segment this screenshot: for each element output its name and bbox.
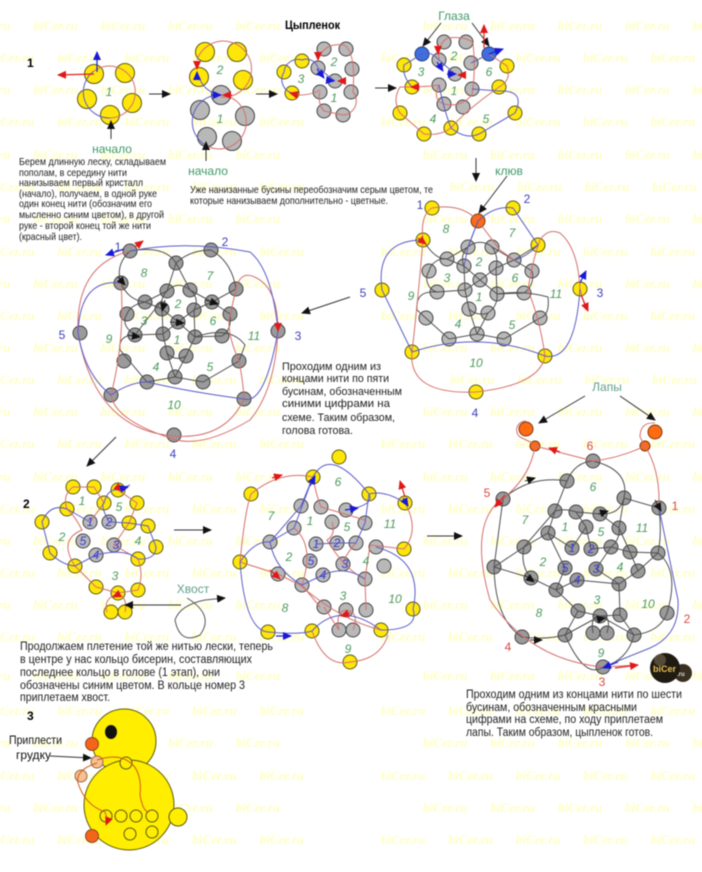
diagram: eyes rings: 5 bbox=[483, 112, 490, 126]
diagram: third ring: 3 bbox=[298, 72, 305, 86]
diagram: finished head: 3 bbox=[295, 329, 302, 343]
text block: recolor note: которые нанизываем дополнительно - цветные. bbox=[190, 195, 388, 207]
tail label: Хвост bbox=[177, 582, 210, 596]
diagram: body rings: 4 bbox=[320, 568, 327, 582]
arrow bbox=[256, 93, 277, 95]
logo: biCer badge: .ru bbox=[677, 672, 685, 678]
diagram: body start bbox=[35, 480, 225, 638]
diagram: head with beak: 2 bbox=[475, 255, 483, 269]
diagram: finished head: 1 bbox=[174, 333, 180, 347]
diagram: finished body with paws: 6 bbox=[590, 480, 597, 494]
diagram: finished body with paws: 3 bbox=[599, 675, 606, 689]
diagram: finished head: 4 bbox=[170, 447, 177, 461]
text block: step 1 instructions: Берем длинную леску, складываем bbox=[19, 156, 166, 168]
step number 2: 2 bbox=[23, 497, 30, 511]
diagram: body rings: 4 bbox=[363, 554, 370, 568]
diagram: body rings: 7 bbox=[268, 509, 276, 523]
text block: head complete: концами нити по пяти bbox=[282, 373, 389, 385]
text block: head complete: синими цифрами на bbox=[282, 398, 391, 410]
diagram: head with beak: 5 bbox=[360, 286, 367, 300]
diagram: eyes rings: 2 bbox=[450, 49, 458, 63]
diagram: head with beak: 3 bbox=[444, 271, 451, 285]
text block: step 1 instructions: руке - второй конец той же нити bbox=[19, 220, 151, 232]
diagram: head with beak bbox=[360, 164, 604, 420]
infographic: beaded chick pattern: biCer.ru biCer.ru biCer.ru biCer.ru biCer.ru bbox=[381, 501, 695, 516]
infographic: beaded chick pattern: biCer.ru biCer.ru biCer.ru biCer.ru biCer.ru bbox=[381, 436, 695, 451]
infographic: beaded chick pattern: biCer.ru biCer.ru biCer.ru biCer.ru biCer.ru bbox=[381, 308, 695, 323]
diagram: finished head: 6 bbox=[210, 314, 217, 328]
text block: final instructions: бусинам, обозначенным красными bbox=[466, 702, 637, 714]
text block: head complete: Проходим одним из bbox=[282, 361, 381, 373]
diagram: body rings: 1 bbox=[307, 514, 313, 528]
diagram: head with beak: 5 bbox=[509, 318, 516, 332]
arrow bbox=[475, 158, 477, 181]
diagram: finished body with paws: 5 bbox=[484, 486, 491, 500]
title: Цыпленок bbox=[285, 18, 341, 32]
diagram: finished head: 1 bbox=[115, 240, 122, 254]
diagram: finished body with paws: 3 bbox=[594, 593, 601, 607]
diagram: body start: 1 bbox=[79, 494, 85, 508]
infographic: beaded chick pattern: biCer.ru biCer.ru biCer.ru biCer.ru biCer.ru bbox=[381, 114, 695, 129]
diagram: finished head: 5 bbox=[59, 328, 66, 342]
diagram: body rings: 3 bbox=[342, 557, 349, 571]
diagram: body start: 4 bbox=[93, 548, 100, 562]
infographic: beaded chick pattern: biCer.ru biCer.ru biCer.ru biCer.ru biCer.ru bbox=[381, 629, 695, 644]
text block: step 2 instructions bbox=[20, 641, 273, 704]
diagram: finished head bbox=[59, 235, 302, 461]
diagram: finished body with paws: 2 bbox=[684, 612, 691, 626]
diagram: finished head: 2 bbox=[174, 297, 182, 311]
diagram: eyes rings: 1 bbox=[451, 84, 457, 98]
diagram: finished body with paws: 11 bbox=[636, 521, 648, 535]
beak bbox=[86, 738, 98, 750]
diagram: finished body with paws: 1 bbox=[562, 520, 568, 534]
text block: step 2 instructions: Продолжаем плетение той же нитью лески, теперь bbox=[20, 641, 273, 653]
diagram: head with beak: 4 bbox=[455, 317, 462, 331]
diagram: finished body with paws: 5 bbox=[562, 561, 569, 575]
infographic: beaded chick pattern: biCer.ru biCer.ru biCer.ru biCer.ru biCer.ru bbox=[381, 50, 695, 65]
diagram: finished body with paws: 1 bbox=[672, 499, 679, 513]
beak bead bbox=[471, 214, 485, 228]
diagram: head with beak: 1 bbox=[417, 198, 424, 212]
diagram: head with beak: 3 bbox=[597, 286, 604, 300]
diagram: body rings: 11 bbox=[384, 517, 396, 531]
diagram: body rings: 8 bbox=[282, 601, 289, 615]
diagram: finished body with paws: 9 bbox=[598, 646, 605, 660]
arrow bbox=[620, 396, 655, 420]
diagram: finished head: 2 bbox=[222, 235, 229, 249]
chest beads bbox=[75, 756, 103, 782]
diagram: eyes rings: 6 bbox=[486, 65, 493, 79]
text block: step 1 instructions bbox=[19, 156, 166, 243]
diagram: third ring: 1 bbox=[331, 91, 337, 105]
text block: head complete: схеме. Таким образом, bbox=[282, 412, 395, 424]
diagram: finished head: 5 bbox=[207, 360, 214, 374]
text block: final instructions bbox=[466, 689, 682, 739]
diagram: body start: 2 bbox=[105, 515, 113, 529]
diagram: finished head: 11 bbox=[248, 329, 260, 343]
text block: step 2 instructions: обозначены синим цветом. В кольце номер 3 bbox=[20, 680, 245, 692]
arrow bbox=[50, 756, 91, 758]
diagram: third ring bbox=[277, 42, 359, 122]
diagram: head with beak: 4 bbox=[472, 406, 479, 420]
diagram: finished body with paws: 2 bbox=[539, 555, 547, 569]
arrow bbox=[87, 437, 116, 466]
diagram: third ring: 2 bbox=[330, 55, 338, 69]
diagram: body start: 5 bbox=[80, 534, 87, 548]
tail loop bbox=[175, 598, 225, 638]
diagram: head with beak: 8 bbox=[443, 222, 450, 236]
diagram: finished body with paws: 4 bbox=[617, 560, 624, 574]
chick body bbox=[84, 760, 174, 850]
arrow bbox=[375, 87, 396, 89]
chick eye bbox=[105, 725, 117, 739]
diagram: finished body with paws: 3 bbox=[593, 562, 600, 576]
infographic: beaded chick pattern: biCer.ru biCer.ru biCer.ru biCer.ru biCer.ru bbox=[381, 703, 695, 718]
diagram: body rings: 3 bbox=[340, 589, 347, 603]
diagram: head with beak: 2 bbox=[524, 192, 531, 206]
infographic: beaded chick pattern: biCer.ru biCer.ru biCer.ru biCer.ru biCer.ru bbox=[381, 832, 695, 847]
arrow bbox=[174, 529, 211, 531]
diagram: finished body with paws: 5 bbox=[598, 525, 605, 539]
diagram: finished body with paws: 4 bbox=[574, 573, 581, 587]
diagram: head with beak: 9 bbox=[408, 289, 415, 303]
diagram: body start: 3 bbox=[113, 538, 120, 552]
diagram: finished body with paws: 10 bbox=[641, 597, 655, 611]
arrow bbox=[302, 297, 350, 313]
diagram: finished body with paws: 1 bbox=[569, 541, 575, 555]
infographic: beaded chick pattern: biCer.ru biCer.ru biCer.ru biCer.ru biCer.ru bbox=[381, 565, 695, 580]
diagram: eyes rings: Глаза bbox=[438, 9, 470, 23]
diagram: finished head: 4 bbox=[153, 360, 160, 374]
logo: biCer badge: biCer bbox=[653, 664, 677, 674]
arrow bbox=[149, 93, 170, 95]
diagram: body rings: 10 bbox=[388, 592, 402, 606]
diagram: eyes rings: 4 bbox=[430, 112, 437, 126]
diagram: body rings: 9 bbox=[345, 642, 352, 656]
step number 1: 1 bbox=[27, 56, 34, 70]
diagram: head with beak: 1 bbox=[476, 290, 482, 304]
diagram: body rings: 2 bbox=[285, 550, 293, 564]
text block: final instructions: цифрами на схеме, по ходу приплетаем bbox=[466, 714, 663, 726]
diagram: finished head: 8 bbox=[141, 266, 148, 280]
infographic: beaded chick pattern: biCer.ru biCer.ru biCer.ru biCer.ru biCer.ru bbox=[381, 768, 695, 783]
diagram: body rings: 5 bbox=[344, 520, 351, 534]
step number 3: 3 bbox=[27, 709, 34, 723]
eye beads bbox=[415, 47, 496, 61]
diagram: body rings: 2 bbox=[333, 536, 341, 550]
text block: step 1 instructions: (начало), получаем, в одной руке bbox=[19, 188, 157, 200]
diagram: eyes rings bbox=[393, 9, 522, 141]
diagram: finished head: 7 bbox=[207, 269, 215, 283]
chick wing bbox=[169, 808, 187, 826]
diagram: finished body with paws: 8 bbox=[536, 606, 543, 620]
diagram: body start: 2 bbox=[58, 530, 66, 544]
diagram: finished body with paws: 2 bbox=[587, 542, 595, 556]
arrow bbox=[539, 396, 585, 423]
diagram: head with beak: 11 bbox=[550, 287, 562, 301]
text block: head complete bbox=[282, 361, 402, 437]
text block: recolor note: Уже нанизанные бусины переобозначим серым цветом, те bbox=[190, 184, 433, 196]
diagram: finished body with paws: 4 bbox=[505, 640, 512, 654]
diagram: finished body with paws bbox=[481, 421, 691, 689]
diagram: head with beak: 10 bbox=[469, 356, 483, 370]
diagram: body start: 5 bbox=[116, 500, 123, 514]
diagram: body start: 4 bbox=[135, 534, 142, 548]
diagram: body start: 3 bbox=[112, 569, 119, 583]
diagram: body start: 1 bbox=[87, 515, 93, 529]
infographic: beaded chick pattern: biCer.ru biCer.ru biCer.ru biCer.ru biCer.ru bbox=[381, 244, 695, 259]
diagram: finished head: 3 bbox=[141, 314, 148, 328]
text block: step 2 instructions: последнее кольцо в голове (1 этап), они bbox=[20, 667, 220, 679]
thread bbox=[78, 757, 149, 825]
label: paws: Лапы bbox=[592, 380, 622, 394]
text block: step 1 instructions: пополам, в середину нити bbox=[19, 167, 127, 179]
diagram: first ring of five beads bbox=[58, 52, 142, 156]
diagram: head with beak: 7 bbox=[509, 226, 517, 240]
text block: step 1 instructions: (красный цвет). bbox=[19, 231, 82, 243]
diagram: first ring of five beads: 1 bbox=[106, 85, 112, 99]
illustration: finished chick: грудку bbox=[16, 750, 51, 762]
diagram: body rings: 6 bbox=[335, 475, 342, 489]
text block: step 1 instructions: один конец нити (обозначим его bbox=[19, 198, 152, 210]
arrow bbox=[427, 535, 462, 537]
label: weave chest: Приплести bbox=[9, 735, 62, 747]
diagram: body rings: 5 bbox=[308, 554, 315, 568]
body beads bbox=[100, 757, 158, 840]
diagram: eyes rings: 3 bbox=[418, 65, 425, 79]
diagram: first ring of five beads: начало bbox=[92, 142, 132, 156]
text block: head complete: бусинам, обозначенным bbox=[282, 386, 402, 398]
paw beads bbox=[519, 422, 662, 451]
text block: recolor note bbox=[190, 184, 433, 207]
diagram: second ring: 1 bbox=[217, 112, 223, 126]
diagram: finished body with paws: 6 bbox=[587, 439, 594, 453]
text block: final instructions: Проходим одним из концами нити по шести bbox=[466, 689, 682, 701]
text block: step 2 instructions: приплетаем хвост. bbox=[20, 692, 110, 704]
logo: biCer badge bbox=[650, 653, 692, 683]
chick head bbox=[92, 709, 156, 773]
text block: step 1 instructions: нанизываем первый кристалл bbox=[19, 177, 143, 189]
text block: step 1 instructions: мысленно синим цветом), в другой bbox=[19, 209, 164, 221]
diagram: finished body with paws: 7 bbox=[522, 513, 530, 527]
text block: final instructions: лапы. Таким образом, цыпленок готов. bbox=[466, 727, 653, 739]
diagram: finished head: 10 bbox=[167, 398, 181, 412]
illustration: finished chick bbox=[9, 709, 187, 850]
diagram: body rings: 1 bbox=[313, 537, 319, 551]
diagram: head with beak: клюв bbox=[495, 164, 523, 178]
diagram: second ring: начало bbox=[188, 164, 228, 178]
diagram: body rings bbox=[233, 450, 420, 669]
text block: head complete: голова готова. bbox=[282, 425, 353, 437]
diagram: finished head: 9 bbox=[106, 332, 113, 346]
diagram: second ring: 2 bbox=[216, 63, 224, 77]
text block: step 2 instructions: в центре у нас кольцо бисерин, составляющих bbox=[20, 654, 252, 666]
foot bbox=[86, 830, 98, 842]
diagram: second ring bbox=[188, 41, 254, 178]
diagram: head with beak: 6 bbox=[512, 271, 519, 285]
